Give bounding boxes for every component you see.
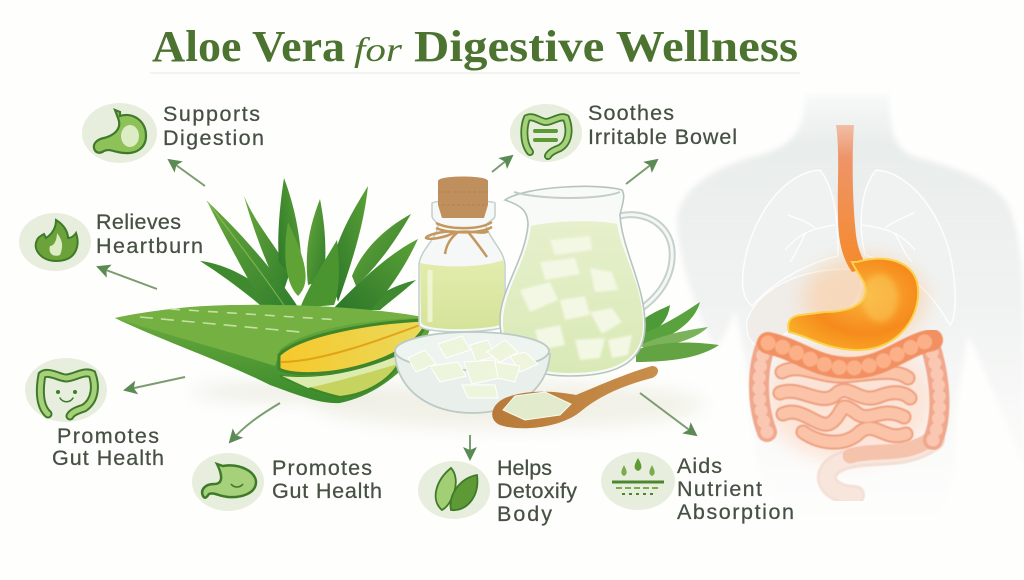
ice in jug [512,236,632,360]
label: Promotes [272,456,372,480]
cork [438,176,488,218]
title: for [354,32,403,69]
small intestine [780,369,910,442]
title: Digestive Wellness [414,22,798,71]
benefit: relieves heartburn [19,210,203,271]
label [677,454,794,524]
icon: intestine [524,117,568,156]
aloe cubes [408,336,538,398]
label: Heartburn [96,234,203,258]
title: Aloe Vera [152,22,345,71]
label [52,424,164,470]
benefit: soothes irritable bowel [510,101,737,162]
label [272,456,382,503]
lower colon [827,438,935,495]
title [152,22,798,71]
body silhouette [677,95,1024,535]
jug liquid [503,221,643,373]
benefit: promotes gut health bottom [192,453,382,511]
label: Irritable Bowel [588,125,737,149]
icon: happy stomach [202,464,256,498]
label: Supports [163,102,260,126]
label [588,101,737,149]
glass bottle with cork [419,176,505,332]
aloe cut leaf [115,305,432,403]
label: Gut Health [52,446,164,470]
label: Detoxify [497,479,577,503]
label [497,456,577,526]
glass bowl with aloe cubes [395,332,550,413]
esophagus [836,125,868,272]
benefit: helps detoxify body [418,456,577,526]
icon: flame [36,220,78,261]
label [163,102,264,150]
aloe plant [200,178,418,313]
benefit: supports digestion [82,102,264,163]
label: Relieves [96,210,181,234]
icon: nutrient absorption [612,458,664,494]
label: Soothes [588,101,674,125]
label: Absorption [677,500,794,524]
label: Digestion [163,126,264,150]
lung veins [785,212,915,262]
label: Nutrient [677,477,762,501]
lungs [743,170,955,325]
wooden spoon [492,366,658,428]
label: Aids [677,454,722,478]
stomach [788,259,918,350]
label: Gut Health [272,479,382,503]
liver [747,269,861,346]
arrows [98,156,696,459]
label [96,210,203,258]
bottle liquid [420,260,504,329]
benefit: promotes gut health left [25,358,164,470]
jug handle [620,215,672,308]
icon: happy intestine [40,373,94,416]
glass jug [500,186,672,376]
label: Body [497,502,552,526]
icon: stomach [94,110,146,153]
table shadow [190,381,705,429]
benefit: aids nutrient absorption [601,452,794,524]
icon: leaves [436,468,456,510]
large intestine [759,340,939,440]
twine [426,222,492,257]
human torso illustration [677,95,1024,535]
leaf cut flesh [279,320,427,374]
label: Helps [497,456,552,480]
organ glow [803,255,927,345]
label: Promotes [57,424,159,448]
background leaves behind jug [636,302,719,362]
